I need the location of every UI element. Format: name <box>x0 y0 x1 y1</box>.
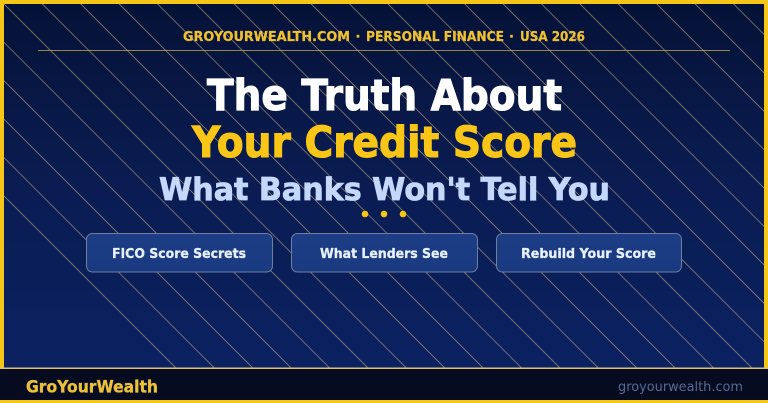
footer bar <box>0 368 768 400</box>
header line of text: · <box>356 30 360 45</box>
button: Rebuild Your Score <box>496 234 682 272</box>
title line 1: The Truth About <box>207 72 562 121</box>
header line of text: USA 2026 <box>520 30 585 45</box>
button: What Lenders See: What Lenders See <box>320 246 448 262</box>
header line of text: PERSONAL FINANCE <box>366 30 504 45</box>
button: FICO Score Secrets <box>86 234 272 272</box>
button: Rebuild Your Score: Rebuild Your Score <box>521 246 656 262</box>
button: FICO Score Secrets: FICO Score Secrets <box>112 246 246 262</box>
decorative dots <box>362 211 406 217</box>
header line of text: · <box>509 30 514 45</box>
footer brand: GroYourWealth <box>26 378 158 396</box>
button: What Lenders See <box>292 234 478 272</box>
footer url: groyourwealth.com <box>618 379 743 395</box>
header line of text <box>183 30 585 45</box>
subtitle: What Banks Won't Tell You <box>159 172 610 208</box>
title line 2: Your Credit Score <box>191 119 577 168</box>
header line of text: GROYOURWEALTH.COM <box>183 30 350 45</box>
